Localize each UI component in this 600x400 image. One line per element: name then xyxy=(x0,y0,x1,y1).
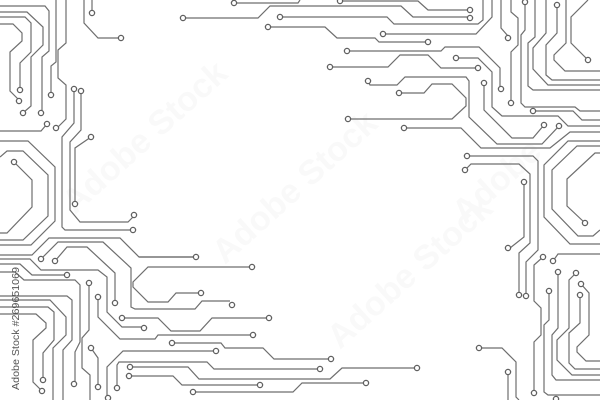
right octagon chip outline xyxy=(544,141,600,244)
circuit traces: top centre xyxy=(180,0,600,148)
circuit traces: top-left corner xyxy=(0,0,137,233)
circuit traces: bottom centre xyxy=(105,254,420,400)
stock id text: Adobe Stock #269651069 xyxy=(10,267,22,390)
circuit traces: top-right corner xyxy=(501,0,600,129)
left octagon chip outline xyxy=(0,141,55,245)
circuit traces: centre right xyxy=(462,153,538,299)
faint stock watermarks: Adobe Stock xyxy=(55,54,235,221)
faint stock watermarks xyxy=(55,54,549,356)
faint stock watermarks: Adobe xyxy=(445,132,549,231)
circuit traces: bottom-right corner xyxy=(476,254,600,400)
faint stock watermarks: Adobe Stock xyxy=(205,104,385,271)
circuit traces: bottom-left corner xyxy=(0,238,251,400)
faint stock watermarks: Adobe Stock xyxy=(320,189,500,356)
